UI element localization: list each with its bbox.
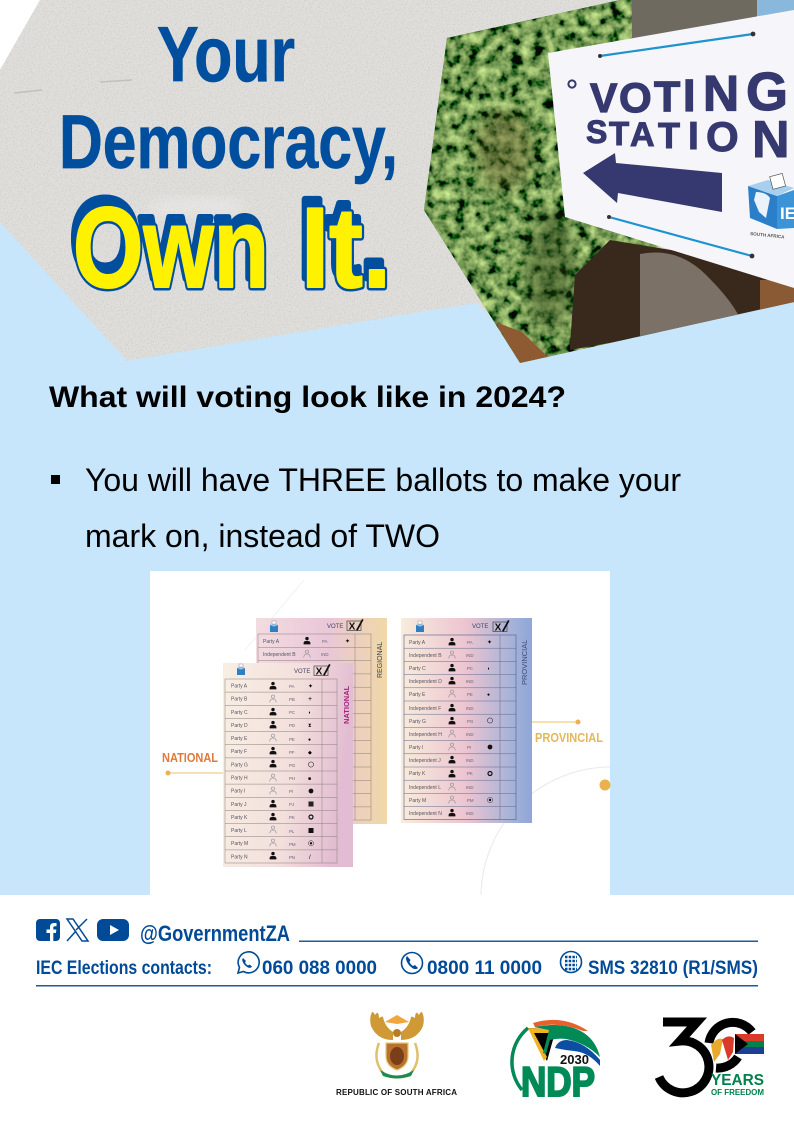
provincial ballot xyxy=(401,618,532,823)
hero: concrete wall xyxy=(0,0,794,365)
national ballot: PI xyxy=(289,789,293,794)
logo: 30 years of freedom xyxy=(659,1022,764,1097)
bullet text xyxy=(51,462,681,554)
provincial ballot: IND xyxy=(466,811,474,816)
provincial ballot: PROVINCIAL xyxy=(520,640,529,685)
national ballot xyxy=(223,663,353,867)
sign board: T xyxy=(658,115,680,156)
provincial ballot: Independent N xyxy=(409,811,442,817)
regional ballot: PA xyxy=(322,639,328,644)
sign board: T xyxy=(654,73,680,121)
IEC ballot box logo xyxy=(748,173,794,240)
national ballot: PE xyxy=(289,737,295,742)
national ballot: VOTE xyxy=(294,669,310,675)
contacts row: IEC Elections contacts: xyxy=(36,958,212,979)
icon: facebook xyxy=(36,919,60,941)
label: provincial xyxy=(532,720,603,745)
label: provincial: PROVINCIAL xyxy=(535,731,603,745)
sign board: I xyxy=(683,70,696,121)
sign board: O xyxy=(619,74,652,121)
sign arrow xyxy=(583,153,722,212)
national ballot: NATIONAL xyxy=(342,685,351,724)
tree trunk and ground xyxy=(495,240,794,363)
sign board: A xyxy=(630,116,655,154)
national ballot: PL xyxy=(289,829,295,834)
provincial ballot: PM xyxy=(467,798,474,803)
national ballot: Party G xyxy=(231,762,248,768)
provincial ballot: Party K xyxy=(409,771,426,777)
own it shadow: Own xyxy=(70,176,266,303)
social handle: @GovernmentZA xyxy=(140,921,290,946)
icon: phone xyxy=(402,952,422,974)
national ballot: Party H xyxy=(231,776,248,782)
national ballot: PA xyxy=(289,684,295,689)
social media row xyxy=(36,919,290,946)
national ballot: ◆ xyxy=(308,750,312,756)
provincial ballot: Party G xyxy=(409,719,426,725)
national ballot: ● xyxy=(308,737,311,743)
national ballot: Party B xyxy=(231,697,248,703)
provincial ballot: Party M xyxy=(409,798,426,804)
national ballot: ◗ xyxy=(308,710,311,716)
logo: 30 years of freedom: OF FREEDOM xyxy=(711,1088,764,1097)
own it yellow: It. xyxy=(301,185,391,312)
foliage xyxy=(420,0,660,365)
white top-left corner xyxy=(0,0,40,70)
provincial ballot: IND xyxy=(466,653,474,658)
regional ballot: Independent B xyxy=(263,652,296,658)
national ballot: / xyxy=(309,855,311,861)
contacts row: 0800 11 0000 xyxy=(427,958,542,979)
provincial ballot: ● xyxy=(487,692,490,698)
national ballot: Party C xyxy=(231,710,248,716)
national ballot: PD xyxy=(289,723,295,728)
national ballot: ⧗ xyxy=(308,723,312,729)
national ballot: PJ xyxy=(289,802,294,807)
provincial ballot: Party I xyxy=(409,745,423,751)
label: national: NATIONAL xyxy=(162,751,218,765)
sign board: I xyxy=(688,115,699,158)
national ballot: Party K xyxy=(231,815,248,821)
title: Your xyxy=(157,10,295,98)
label: national xyxy=(162,751,223,776)
logo: 30 years of freedom: YEARS xyxy=(711,1072,764,1089)
national ballot: Party D xyxy=(231,723,248,729)
provincial ballot: IND xyxy=(466,679,474,684)
light blue panel xyxy=(0,0,794,895)
national ballot: PN xyxy=(289,855,295,860)
logo: NDP 2030 xyxy=(512,1020,600,1105)
contacts row xyxy=(36,952,758,979)
provincial ballot: PK xyxy=(467,771,473,776)
national ballot: Party M xyxy=(231,841,248,847)
provincial ballot: IND xyxy=(466,732,474,737)
national ballot: ✦ xyxy=(308,683,313,690)
provincial ballot: Party A xyxy=(409,640,426,646)
provincial ballot: IND xyxy=(466,785,474,790)
bullet text: You will have THREE ballots to make your xyxy=(85,462,681,498)
national ballot: Party N xyxy=(231,854,248,860)
provincial ballot: Independent H xyxy=(409,732,442,738)
ballot illustration panel xyxy=(150,571,610,895)
regional ballot: Party A xyxy=(263,639,280,645)
title: Democracy, xyxy=(59,100,398,185)
sign text xyxy=(568,80,576,88)
provincial ballot: VOTE xyxy=(472,624,488,630)
provincial ballot: PA xyxy=(467,640,473,645)
provincial ballot: Party E xyxy=(409,692,426,698)
national ballot: PH xyxy=(289,776,295,781)
icon: whatsapp xyxy=(238,952,259,973)
national ballot: Party L xyxy=(231,828,247,834)
contacts row: 060 088 0000 xyxy=(262,958,377,979)
sign board: O xyxy=(706,113,739,160)
national ballot: Party A xyxy=(231,684,248,690)
sign board: S xyxy=(586,114,607,150)
logo: coat of arms xyxy=(336,1012,457,1097)
provincial ballot: PI xyxy=(467,745,471,750)
own it shadow: It. xyxy=(301,185,391,312)
title xyxy=(59,10,398,312)
national ballot: PM xyxy=(289,842,296,847)
sign board: N xyxy=(752,111,790,169)
national ballot: Party F xyxy=(231,749,247,755)
sign board: V xyxy=(590,75,618,121)
regional ballot: IND xyxy=(321,652,329,657)
national ballot: PK xyxy=(289,815,295,820)
provincial ballot: Independent L xyxy=(409,785,441,791)
regional ballot: ✦ xyxy=(345,638,350,645)
logo: NDP 2030: 2030 xyxy=(560,1053,589,1067)
icon: youtube xyxy=(97,919,129,941)
own it shadow: Own xyxy=(73,185,269,312)
national ballot: Party J xyxy=(231,802,247,808)
provincial ballot: IND xyxy=(466,706,474,711)
provincial ballot: Party C xyxy=(409,666,426,672)
national ballot: Party E xyxy=(231,736,248,742)
hero photo: voting station sign xyxy=(420,0,794,365)
sign board xyxy=(548,10,794,288)
provincial ballot: Independent B xyxy=(409,653,442,659)
provincial ballot: PE xyxy=(467,692,473,697)
provincial ballot: Independent F xyxy=(409,706,441,712)
national ballot: PG xyxy=(289,763,296,768)
own it shadow: It. xyxy=(298,176,388,303)
national ballot: PB xyxy=(289,697,295,702)
provincial ballot: Independent D xyxy=(409,679,442,685)
sign board: G xyxy=(746,62,788,122)
national ballot: ■ xyxy=(308,776,311,782)
national ballot: + xyxy=(308,696,312,703)
sign board: T xyxy=(609,115,629,152)
sign strings xyxy=(600,34,753,56)
logo: NDP 2030: NDP xyxy=(521,1058,595,1105)
heading: What will voting look like in 2024? xyxy=(49,381,566,414)
national ballot: PF xyxy=(289,750,295,755)
provincial ballot: IND xyxy=(466,758,474,763)
IEC ballot box logo: SOUTH AFRICA xyxy=(750,231,785,240)
provincial ballot: ✦ xyxy=(487,639,492,646)
pole and sky xyxy=(632,0,794,38)
regional ballot: REGIONAL xyxy=(377,642,384,678)
national ballot: Party I xyxy=(231,789,245,795)
icon: X xyxy=(67,919,88,941)
provincial ballot: PG xyxy=(467,719,474,724)
own it yellow: Own xyxy=(73,185,269,312)
bullet text: mark on, instead of TWO xyxy=(85,518,440,554)
regional ballot: VOTE xyxy=(327,624,343,630)
national ballot: PC xyxy=(289,710,295,715)
regional ballot xyxy=(256,618,387,824)
provincial ballot: PC xyxy=(467,666,473,671)
sign board: N xyxy=(703,66,739,122)
provincial ballot: Independent J xyxy=(409,758,441,764)
provincial ballot: ◗ xyxy=(487,666,490,672)
icon: SA flag xyxy=(735,1034,764,1054)
contacts row: SMS 32810 (R1/SMS) xyxy=(588,958,758,979)
icon: keypad xyxy=(560,952,582,972)
emblem caption: REPUBLIC OF SOUTH AFRICA xyxy=(336,1088,457,1097)
